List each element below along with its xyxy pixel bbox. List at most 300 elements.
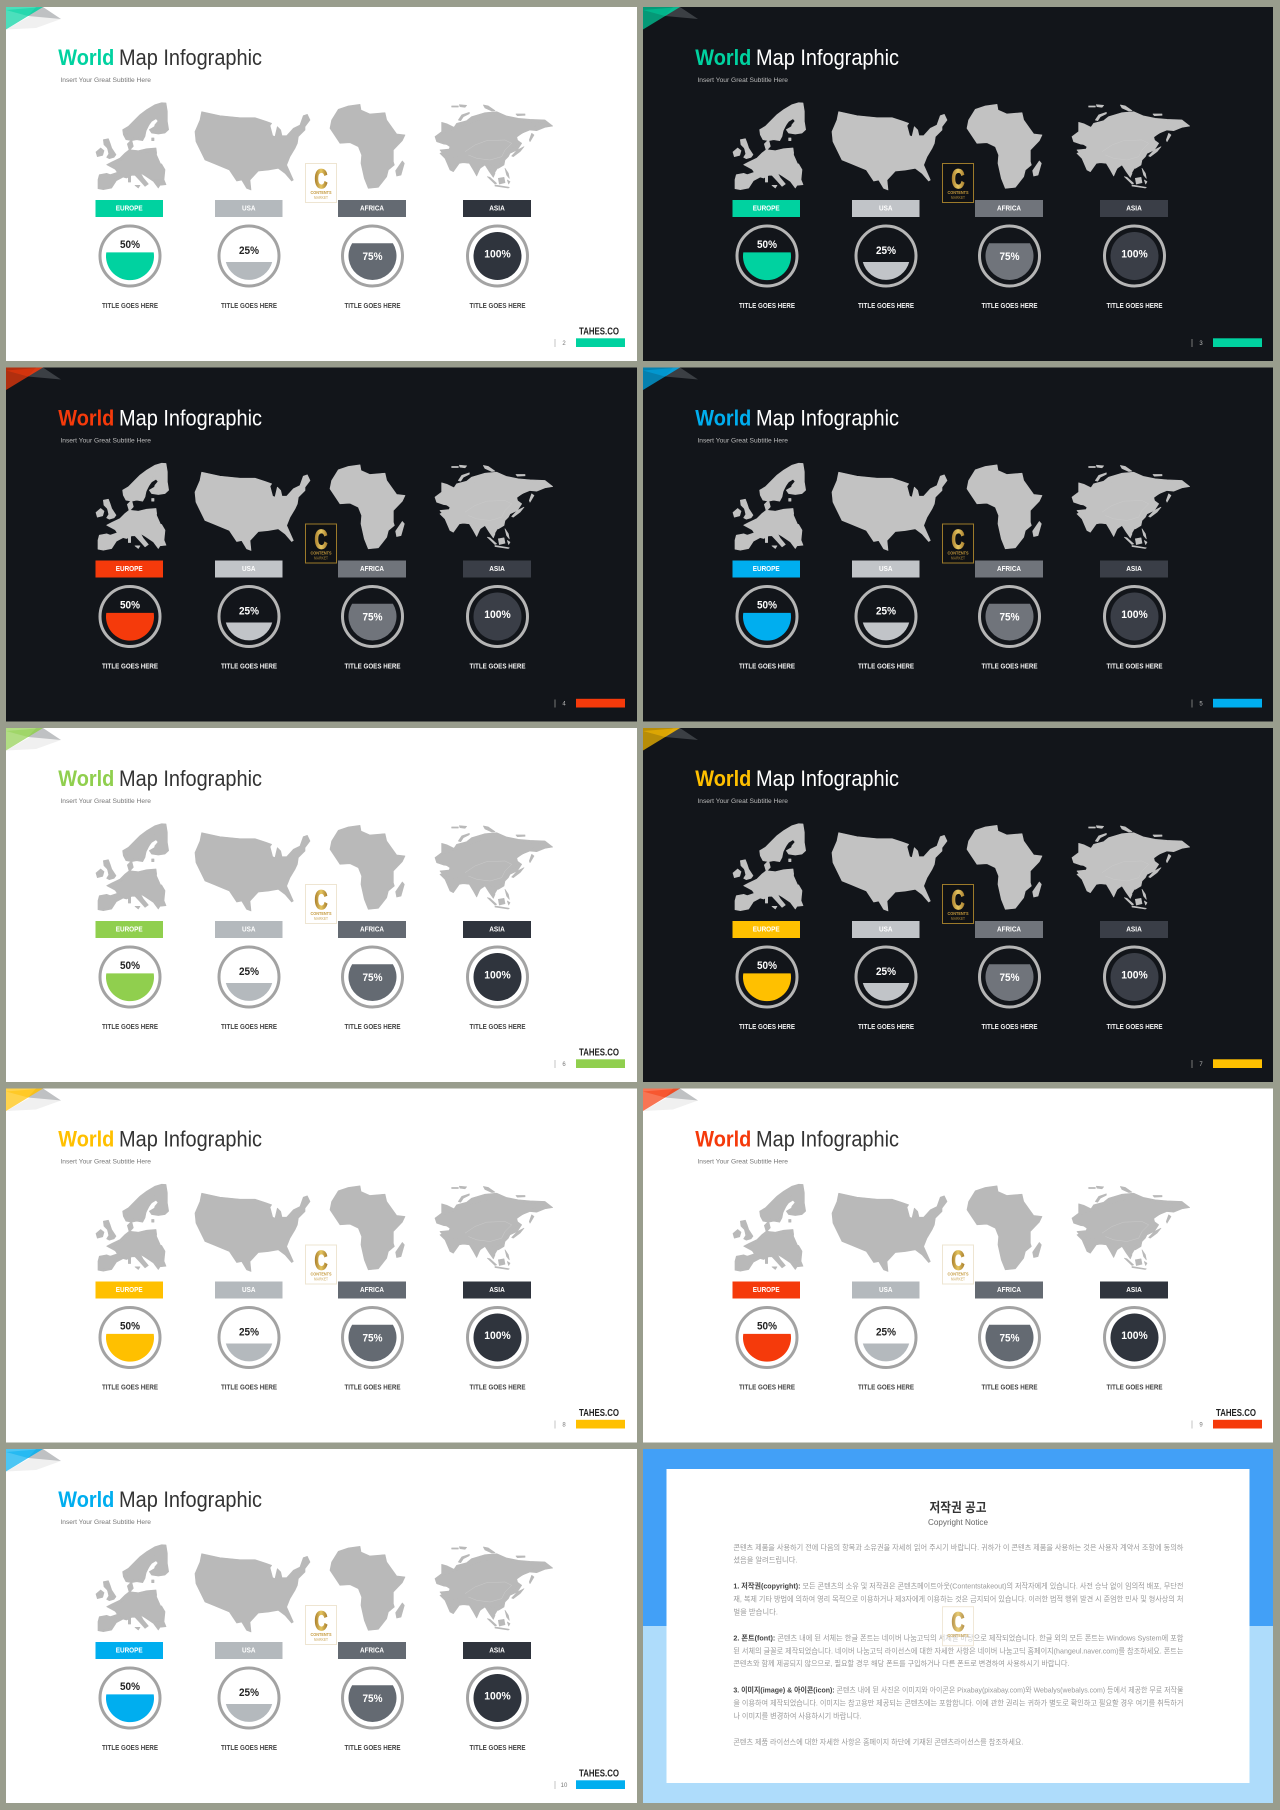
watermark badge: CONTENTS <box>948 190 968 195</box>
subtitle: Insert Your Great Subtitle Here <box>60 77 151 84</box>
gauge: 25%: 25% <box>876 966 896 978</box>
copyright body text: 2. 폰트(font): 콘텐츠 내에 된 서체는 한글 폰트는 네이버 나눔고딕의 서체를 바탕으로 제작되었습니다. 한글 외의 모든 폰트는 Windows System에 포함 <box>733 1633 1184 1642</box>
gauge: 75%: 75% <box>362 251 383 263</box>
map: USA <box>195 1193 310 1271</box>
map: Asia <box>1072 826 1190 909</box>
watermark badge: CONTENTS <box>948 911 968 916</box>
caption: Asia: TITLE GOES HERE <box>1106 1024 1163 1031</box>
watermark badge: C <box>314 885 328 915</box>
gauge: 25% <box>219 1668 279 1728</box>
subtitle: Insert Your Great Subtitle Here <box>697 1158 788 1166</box>
label: USA <box>215 1282 282 1298</box>
label: Africa: AFRICA <box>360 1285 384 1294</box>
label: Africa: AFRICA <box>997 564 1021 573</box>
copyright body text: 셨음을 알려드립니다. <box>733 1556 797 1565</box>
title: Map Infographic <box>119 1487 262 1512</box>
gauge: 100% <box>1104 586 1164 646</box>
title: World <box>58 1126 114 1152</box>
footer: 10 <box>561 1783 568 1789</box>
caption: Africa: TITLE GOES HERE <box>982 303 1038 310</box>
gauge: 25%: 25% <box>239 606 259 618</box>
title: Map Infographic <box>756 406 899 430</box>
label: Europe: EUROPE <box>116 564 143 573</box>
panel: slide 5 dark blue <box>643 368 1273 722</box>
watermark badge: CONTENTS <box>310 1632 332 1637</box>
label: Asia: ASIA <box>489 204 505 212</box>
gauge: 25% <box>856 226 916 286</box>
caption: Europe: TITLE GOES HERE <box>739 664 795 671</box>
subtitle: Insert Your Great Subtitle Here <box>697 77 788 84</box>
label: Africa: AFRICA <box>997 204 1021 212</box>
gauge: 25% <box>856 1308 916 1368</box>
brand: TAHES.CO <box>579 326 619 338</box>
brand: TAHES.CO <box>579 1408 619 1419</box>
footer: 8 <box>562 1422 566 1428</box>
gauge: 25%: 25% <box>239 1687 259 1699</box>
gauge: 25%: 25% <box>876 245 896 257</box>
label: Africa <box>975 560 1043 578</box>
corner ribbon <box>6 7 61 30</box>
footer <box>555 1420 625 1428</box>
caption: Europe: TITLE GOES HERE <box>102 1745 158 1752</box>
watermark badge <box>306 524 336 563</box>
caption: Asia: TITLE GOES HERE <box>1106 303 1163 310</box>
gauge: 75% <box>342 1668 402 1728</box>
footer <box>1192 1420 1262 1428</box>
gauge: 100% <box>1104 226 1164 286</box>
gauge: 100%: 100% <box>484 1330 511 1342</box>
gauge: 25%: 25% <box>239 966 259 978</box>
watermark badge: C <box>952 1607 964 1637</box>
copyright subheading: Copyright Notice <box>928 1517 988 1527</box>
panel: slide 3 dark teal <box>643 7 1273 361</box>
watermark badge: MARKET <box>314 916 328 921</box>
map: Asia <box>1072 465 1190 548</box>
copyright body text: 된 서체의 글꼴로 제작되었습니다. 네이버 나눔고딕 라이선스에 대한 자세한 사항은 네이버 나눔고딕 홈페이지(hangeul.naver.com)를 참조하세요. 폰트는 <box>733 1646 1184 1655</box>
gauge: 50%: 50% <box>120 1681 140 1693</box>
label: Africa: AFRICA <box>997 924 1021 934</box>
label: Europe: EUROPE <box>116 204 143 212</box>
gauge: 50% <box>100 947 160 1007</box>
copyright heading: 저작권 공고 <box>930 1500 987 1515</box>
title: World <box>58 766 114 791</box>
gauge: 25%: 25% <box>239 1326 259 1338</box>
gauge: 50%: 50% <box>757 600 777 612</box>
footer: 2 <box>562 341 566 347</box>
caption: USA: TITLE GOES HERE <box>858 303 914 310</box>
title: Map Infographic <box>756 766 899 791</box>
corner ribbon <box>643 368 698 390</box>
label: Africa <box>338 921 406 938</box>
label: Europe <box>732 560 800 578</box>
label: USA <box>852 921 920 938</box>
map: Africa <box>330 465 405 549</box>
label: USA: USA <box>242 1646 256 1654</box>
label: USA: USA <box>242 924 256 934</box>
subtitle: Insert Your Great Subtitle Here <box>697 798 788 805</box>
map: Europe <box>96 824 169 911</box>
title <box>58 1126 262 1152</box>
gauge: 75%: 75% <box>1000 251 1020 263</box>
watermark badge <box>942 1607 974 1646</box>
gauge: 75%: 75% <box>1000 612 1020 624</box>
title: World <box>58 45 114 70</box>
title <box>695 45 899 70</box>
caption: USA: TITLE GOES HERE <box>858 1385 914 1392</box>
watermark badge: CONTENTS <box>948 1272 968 1276</box>
label: Europe <box>96 560 163 578</box>
label: Asia: ASIA <box>1126 924 1142 934</box>
gauge: 75%: 75% <box>362 1332 383 1344</box>
caption: Asia: TITLE GOES HERE <box>470 303 526 310</box>
watermark badge: CONTENTS <box>310 1272 332 1276</box>
label: Europe <box>96 1642 163 1659</box>
gauge: 75% <box>980 947 1040 1007</box>
map: Africa <box>330 825 405 909</box>
map: Africa <box>967 1186 1042 1270</box>
caption: Africa: TITLE GOES HERE <box>344 303 401 310</box>
brand: TAHES.CO <box>1216 1408 1256 1419</box>
title <box>58 45 262 70</box>
label: Africa: AFRICA <box>360 204 384 212</box>
title: World <box>695 45 751 70</box>
gauge: 50% <box>737 586 797 646</box>
gauge: 50% <box>737 1308 797 1368</box>
label: Asia <box>1100 560 1168 578</box>
copyright body text: 콘텐츠 제품 라이선스에 대한 자세한 사항은 홈페이지 하단에 기재된 콘텐츠라이선스를 참조하세요. <box>733 1737 1023 1746</box>
brand: TAHES.CO <box>579 1048 619 1058</box>
gauge: 100%: 100% <box>484 1691 511 1703</box>
watermark badge: C <box>952 164 964 194</box>
caption: Asia: TITLE GOES HERE <box>1106 1385 1163 1392</box>
gauge: 50% <box>100 1308 160 1368</box>
gauge: 100% <box>1104 1308 1164 1368</box>
watermark badge: CONTENTS <box>948 550 968 556</box>
gauge: 50% <box>737 947 797 1007</box>
watermark badge: MARKET <box>951 916 965 921</box>
caption: Europe: TITLE GOES HERE <box>102 1024 158 1031</box>
caption: USA: TITLE GOES HERE <box>221 1745 277 1752</box>
subtitle: Insert Your Great Subtitle Here <box>60 1519 151 1526</box>
title: Map Infographic <box>119 45 262 70</box>
title <box>695 1126 899 1152</box>
watermark badge: CONTENTS <box>948 1633 968 1638</box>
watermark badge: MARKET <box>951 556 965 560</box>
title: Map Infographic <box>119 766 262 791</box>
map: Asia <box>435 1186 553 1269</box>
label: Africa <box>975 921 1043 938</box>
caption: Europe: TITLE GOES HERE <box>739 1024 795 1031</box>
label: USA <box>215 921 282 938</box>
gauge: 50%: 50% <box>120 239 140 251</box>
gauge: 75%: 75% <box>1000 972 1020 984</box>
label: Africa: AFRICA <box>997 1285 1021 1294</box>
copyright body text: 1. 저작권(copyright): 모든 콘텐츠의 소유 및 저작권은 콘텐츠메이트아웃(Contentstakeout)의 저작자에게 있습니다. 사전 승낙 없이 임의적 배포, 무단전 <box>733 1581 1184 1590</box>
caption: Europe: TITLE GOES HERE <box>102 1385 158 1392</box>
footer: 4 <box>562 702 566 708</box>
gauge: 25% <box>219 226 279 286</box>
gauge: 100%: 100% <box>484 249 511 261</box>
map: Europe <box>733 1184 806 1271</box>
gauge: 50%: 50% <box>757 960 777 972</box>
title: World <box>58 1487 114 1512</box>
watermark badge <box>942 884 974 924</box>
label: USA: USA <box>242 204 256 212</box>
label: USA: USA <box>242 564 256 573</box>
corner ribbon <box>643 7 698 30</box>
subtitle: Insert Your Great Subtitle Here <box>60 798 151 805</box>
gauge: 75%: 75% <box>362 1693 383 1705</box>
watermark badge: C <box>952 885 964 915</box>
label: Asia: ASIA <box>1126 1285 1142 1294</box>
copyright body text: 을 이용하여 제작되었습니다. 이미지는 참고용만 제공되는 콘텐츠에는 포함합니다. 이에 관한 권리는 귀하가 별도로 확인하고 필요할 경우 여기를 취득하거 <box>733 1698 1183 1707</box>
label: USA <box>215 560 282 578</box>
title: Map Infographic <box>756 45 899 70</box>
footer: 7 <box>1199 1062 1203 1068</box>
footer <box>555 338 625 347</box>
label: Africa: AFRICA <box>360 1646 384 1654</box>
gauge: 100%: 100% <box>1121 249 1148 261</box>
label: Asia <box>463 1642 531 1659</box>
label: Asia: ASIA <box>489 1646 505 1654</box>
gauge: 25% <box>856 947 916 1007</box>
subtitle: Insert Your Great Subtitle Here <box>697 438 788 444</box>
label: Asia <box>1100 921 1168 938</box>
corner ribbon <box>643 728 698 750</box>
caption: USA: TITLE GOES HERE <box>221 1385 277 1392</box>
footer <box>555 1780 625 1789</box>
label: USA: USA <box>879 204 893 212</box>
label: Africa <box>975 1282 1043 1298</box>
copyright body text: 재, 복제 기타 방법에 의하여 영리 목적으로 이용하거나 제3자에게 이용하는 것은 금지되어 있습니다. 이러한 법적 행위 발견 시 준엄한 민사 및 형사상의 처 <box>733 1594 1183 1603</box>
caption: USA: TITLE GOES HERE <box>221 303 277 310</box>
caption: Africa: TITLE GOES HERE <box>344 1024 401 1031</box>
caption: Africa: TITLE GOES HERE <box>344 1385 401 1392</box>
watermark badge: C <box>952 1246 964 1276</box>
subtitle: Insert Your Great Subtitle Here <box>60 438 151 444</box>
gauge: 50%: 50% <box>757 1320 777 1332</box>
label: Europe: EUROPE <box>753 564 780 573</box>
footer <box>1192 338 1262 347</box>
map: Asia <box>1072 105 1190 188</box>
title: World <box>695 766 751 791</box>
title: Map Infographic <box>119 406 262 430</box>
caption: Africa: TITLE GOES HERE <box>982 1385 1038 1392</box>
watermark badge <box>306 164 336 202</box>
map: Africa <box>330 104 405 188</box>
gauge: 50% <box>737 226 797 286</box>
watermark badge: MARKET <box>314 195 328 200</box>
map: USA <box>832 1193 947 1271</box>
map: Europe <box>96 1184 169 1271</box>
label: Africa <box>338 560 406 578</box>
gauge: 100% <box>468 947 528 1007</box>
copyright body text: 벌을 받습니다. <box>733 1607 778 1616</box>
map: Africa <box>967 825 1042 909</box>
watermark badge <box>942 164 974 202</box>
label: USA: USA <box>242 1285 256 1294</box>
panel: slide 8 white yellow <box>6 1088 637 1442</box>
title: Map Infographic <box>756 1126 899 1152</box>
label: Asia <box>463 921 531 938</box>
corner ribbon <box>6 728 61 750</box>
label: Asia: ASIA <box>489 564 505 573</box>
label: USA: USA <box>879 924 893 934</box>
label: USA <box>215 1642 282 1659</box>
gauge: 50%: 50% <box>120 1320 140 1332</box>
label: Africa: AFRICA <box>360 924 384 934</box>
map: Europe <box>733 824 806 911</box>
map: Africa <box>967 465 1042 549</box>
gauge: 75% <box>342 1308 402 1368</box>
footer <box>1192 1059 1262 1068</box>
corner ribbon <box>643 1088 698 1111</box>
map: Europe <box>96 463 169 550</box>
caption: Europe: TITLE GOES HERE <box>739 1385 795 1392</box>
corner ribbon <box>6 1088 61 1111</box>
title <box>58 406 262 430</box>
copyright body text: 3. 이미지(image) & 아이콘(icon): 콘텐츠 내에 된 사진은 이미지와 아이콘은 Pixabay(pixabay.com)와 Webalys(webalys.com) 등에서 제공한 무료 저작물 <box>733 1685 1184 1694</box>
gauge: 75% <box>342 947 402 1007</box>
gauge: 75% <box>980 586 1040 646</box>
footer <box>1192 699 1262 708</box>
subtitle: Insert Your Great Subtitle Here <box>60 1158 151 1166</box>
gauge: 50% <box>100 1668 160 1728</box>
label: Africa <box>338 1642 406 1659</box>
label: Asia: ASIA <box>489 1285 505 1294</box>
label: Africa: AFRICA <box>360 564 384 573</box>
title: World <box>695 406 751 430</box>
panel: copyright notice <box>643 1449 1273 1803</box>
title: World <box>58 406 114 430</box>
gauge: 75% <box>342 586 402 646</box>
gauge: 100% <box>468 586 528 646</box>
watermark badge <box>942 524 974 563</box>
gauge: 25%: 25% <box>876 606 896 618</box>
copyright body text: 나 이미지를 변경하여 사용하시기 바랍니다. <box>733 1711 861 1720</box>
label: Europe <box>96 921 163 938</box>
caption: Africa: TITLE GOES HERE <box>344 664 401 671</box>
caption: Asia: TITLE GOES HERE <box>470 1024 526 1031</box>
caption: USA: TITLE GOES HERE <box>221 1024 277 1031</box>
map: Asia <box>435 465 553 548</box>
map: Asia <box>435 105 553 188</box>
label: Europe: EUROPE <box>116 1285 143 1294</box>
map: Africa <box>330 1546 405 1630</box>
gauge: 50%: 50% <box>757 239 777 251</box>
label: Europe <box>732 1282 800 1298</box>
label: Africa <box>975 200 1043 217</box>
label: Africa <box>338 1282 406 1298</box>
map: Europe <box>733 103 806 190</box>
gauge: 50% <box>100 586 160 646</box>
caption: Asia: TITLE GOES HERE <box>1106 664 1163 671</box>
label: Europe: EUROPE <box>116 924 143 934</box>
map: Asia <box>1072 1186 1190 1269</box>
map: USA <box>195 472 310 550</box>
gauge: 25% <box>219 1308 279 1368</box>
watermark badge: CONTENTS <box>310 190 332 195</box>
watermark badge: C <box>952 524 964 554</box>
caption: Africa: TITLE GOES HERE <box>982 1024 1038 1031</box>
gauge: 100%: 100% <box>1121 1330 1148 1342</box>
gauge: 75% <box>980 226 1040 286</box>
label: Africa <box>338 200 406 217</box>
gauge: 75%: 75% <box>1000 1332 1020 1344</box>
brand: TAHES.CO <box>579 1768 619 1780</box>
gauge: 25% <box>219 947 279 1007</box>
map: USA <box>832 833 947 911</box>
title <box>58 1487 262 1512</box>
footer: 9 <box>1199 1422 1203 1428</box>
label: Europe <box>732 200 800 217</box>
label: Europe: EUROPE <box>753 924 780 934</box>
label: Europe <box>96 1282 163 1298</box>
map: Asia <box>435 1547 553 1630</box>
caption: USA: TITLE GOES HERE <box>221 664 277 671</box>
watermark badge: MARKET <box>951 195 965 200</box>
caption: Asia: TITLE GOES HERE <box>470 664 526 671</box>
gauge: 25% <box>856 586 916 646</box>
panel: slide 4 dark red <box>6 368 637 722</box>
watermark badge: MARKET <box>314 1276 328 1282</box>
watermark badge <box>306 884 336 924</box>
map: Europe <box>733 463 806 550</box>
watermark badge: CONTENTS <box>310 911 332 916</box>
watermark badge: C <box>314 1246 328 1276</box>
map: Asia <box>435 826 553 909</box>
corner ribbon <box>6 1449 61 1472</box>
caption: Asia: TITLE GOES HERE <box>470 1385 526 1392</box>
label: Europe: EUROPE <box>116 1646 143 1654</box>
footer: 6 <box>562 1062 566 1068</box>
gauge: 100%: 100% <box>1121 970 1148 982</box>
copyright body text: 콘텐츠와 함께 제공되지 않으므로, 필요할 경우 해당 폰트를 구입하거나 다른 폰트로 변경하여 사용하시기 바랍니다. <box>733 1659 1069 1668</box>
panel: slide 9 white red <box>643 1088 1273 1442</box>
gauge: 50%: 50% <box>120 600 140 612</box>
label: Europe <box>96 200 163 217</box>
panel: slide 10 white blue <box>6 1449 637 1803</box>
footer <box>555 1059 625 1068</box>
gauge: 100% <box>1104 947 1164 1007</box>
label: Europe: EUROPE <box>753 1285 780 1294</box>
gauge: 100% <box>468 1668 528 1728</box>
copyright body text: 콘텐츠 제품을 사용하기 전에 다음의 항목과 소유권을 자세히 읽어 주시기 바랍니다. 귀하가 이 콘텐츠 제품을 사용하는 것은 사용자 계약서 조항에 동의하 <box>733 1543 1184 1552</box>
label: Asia <box>463 1282 531 1298</box>
label: USA <box>852 560 920 578</box>
gauge: 75%: 75% <box>362 612 383 624</box>
gauge: 100% <box>468 226 528 286</box>
map: Africa <box>330 1186 405 1270</box>
watermark badge <box>942 1245 974 1284</box>
caption: Africa: TITLE GOES HERE <box>982 664 1038 671</box>
label: Asia: ASIA <box>1126 564 1142 573</box>
watermark badge: C <box>314 164 328 194</box>
watermark badge: C <box>314 524 328 554</box>
gauge: 75% <box>342 226 402 286</box>
map: Europe <box>96 103 169 190</box>
watermark badge: MARKET <box>314 1637 328 1642</box>
caption: Europe: TITLE GOES HERE <box>102 303 158 310</box>
label: USA: USA <box>879 1285 893 1294</box>
copyright body text <box>733 1543 1184 1746</box>
label: Europe <box>732 921 800 938</box>
gauge: 50% <box>100 226 160 286</box>
label: USA <box>215 200 282 217</box>
caption: Africa: TITLE GOES HERE <box>344 1745 401 1752</box>
map: USA <box>832 472 947 550</box>
caption: Europe: TITLE GOES HERE <box>739 303 795 310</box>
